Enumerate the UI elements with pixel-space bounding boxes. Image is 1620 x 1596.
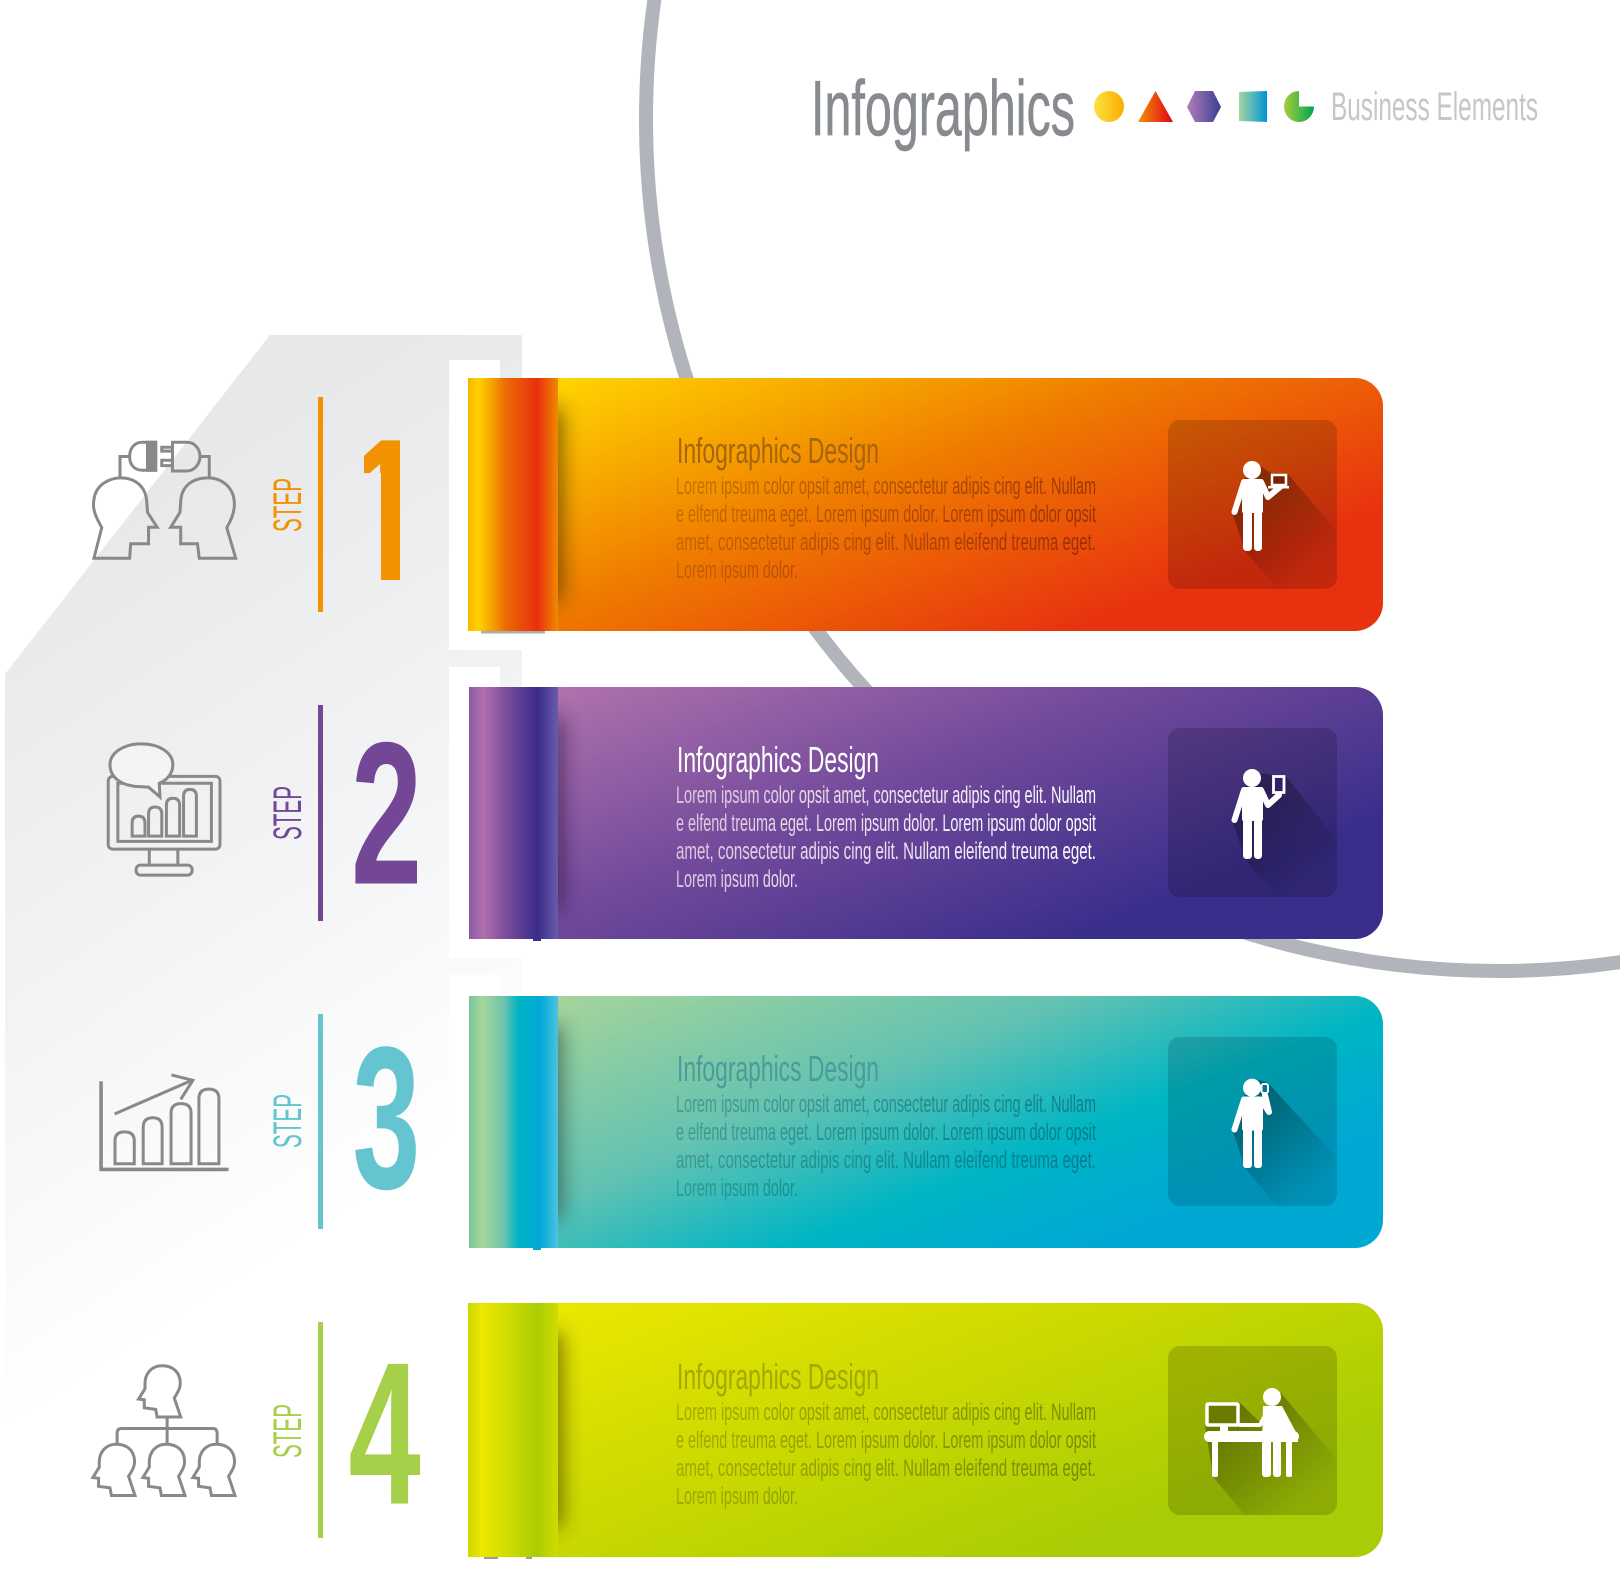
card 3 body text: amet, consectetur adipis cing elit. Nullam eleifend treuma eget. bbox=[676, 1147, 1096, 1174]
step 1 number: 1 bbox=[346, 398, 427, 624]
step 1 label: STEP bbox=[266, 478, 310, 532]
step 1 icon: two heads with plug bbox=[93, 442, 236, 558]
white strips behind folds bbox=[449, 360, 525, 1265]
card 2 heading: Infographics Design bbox=[677, 739, 879, 780]
card 1 body text: amet, consectetur adipis cing elit. Nullam eleifend treuma eget. bbox=[676, 529, 1096, 556]
card 3 heading: Infographics Design bbox=[677, 1048, 879, 1089]
step 2 number: 2 bbox=[351, 699, 422, 927]
header shape icons bbox=[1094, 91, 1314, 122]
step 4 number: 4 bbox=[348, 1321, 421, 1548]
card 1 body text: e elfend treuma eget. Lorem ipsum dolor. Lorem ipsum dolor opsit bbox=[676, 501, 1096, 528]
panel: card 3 bbox=[469, 996, 1383, 1250]
card 1 heading: Infographics Design bbox=[677, 430, 879, 471]
step 2 icon: monitor with speech bubble bbox=[108, 744, 220, 875]
card 4 icon: person at desk bbox=[1168, 1346, 1337, 1515]
step 2 label: STEP bbox=[266, 786, 310, 840]
card 4 heading: Infographics Design bbox=[677, 1356, 879, 1397]
card 1 icon: person with laptop bbox=[1168, 420, 1337, 589]
card 4 body text: Lorem ipsum dolor. bbox=[676, 1483, 798, 1510]
card 4 body text: e elfend treuma eget. Lorem ipsum dolor. Lorem ipsum dolor opsit bbox=[676, 1427, 1096, 1454]
title: Infographics bbox=[811, 64, 1075, 152]
card 2 body text: amet, consectetur adipis cing elit. Nullam eleifend treuma eget. bbox=[676, 838, 1096, 865]
step 3 label: STEP bbox=[266, 1094, 310, 1148]
card 3 body text: Lorem ipsum color opsit amet, consectetur adipis cing elit. Nullam bbox=[676, 1091, 1096, 1118]
step 3 number: 3 bbox=[352, 1005, 420, 1232]
card 3 body text: e elfend treuma eget. Lorem ipsum dolor. Lorem ipsum dolor opsit bbox=[676, 1119, 1096, 1146]
card 4 body text: Lorem ipsum color opsit amet, consectetur adipis cing elit. Nullam bbox=[676, 1399, 1096, 1426]
step 2 divider bbox=[318, 705, 323, 921]
step 1 divider bbox=[318, 397, 323, 612]
card 3 body text: Lorem ipsum dolor. bbox=[676, 1175, 798, 1202]
card 1 body text: Lorem ipsum dolor. bbox=[676, 557, 798, 584]
decorative ring bbox=[646, 0, 1620, 971]
step 4 icon: team hierarchy bbox=[93, 1366, 235, 1495]
card 2 body text: Lorem ipsum dolor. bbox=[676, 866, 798, 893]
background pale panel bbox=[5, 335, 522, 1596]
panel: card 1 bbox=[468, 378, 1383, 634]
card 2 body text: Lorem ipsum color opsit amet, consectetur adipis cing elit. Nullam bbox=[676, 782, 1096, 809]
card 2 body text: e elfend treuma eget. Lorem ipsum dolor. Lorem ipsum dolor opsit bbox=[676, 810, 1096, 837]
panel: card 2 bbox=[469, 687, 1383, 941]
card 1 body text bbox=[676, 473, 1096, 584]
card 1 body text: Lorem ipsum color opsit amet, consectetur adipis cing elit. Nullam bbox=[676, 473, 1096, 500]
card 4 body text: amet, consectetur adipis cing elit. Nullam eleifend treuma eget. bbox=[676, 1455, 1096, 1482]
step 4 divider bbox=[318, 1322, 323, 1538]
card 2 body text bbox=[676, 782, 1096, 893]
card 3 icon: person on phone bbox=[1168, 1037, 1337, 1206]
panel: card 4 bbox=[468, 1303, 1383, 1559]
card 3 body text bbox=[676, 1091, 1096, 1202]
step 3 icon: growth chart bbox=[101, 1075, 229, 1169]
step 3 divider bbox=[318, 1014, 323, 1229]
step 1 number bbox=[364, 440, 400, 580]
card 4 body text bbox=[676, 1399, 1096, 1510]
card 2 icon: person with tablet bbox=[1168, 728, 1337, 897]
step 4 label: STEP bbox=[266, 1404, 310, 1458]
